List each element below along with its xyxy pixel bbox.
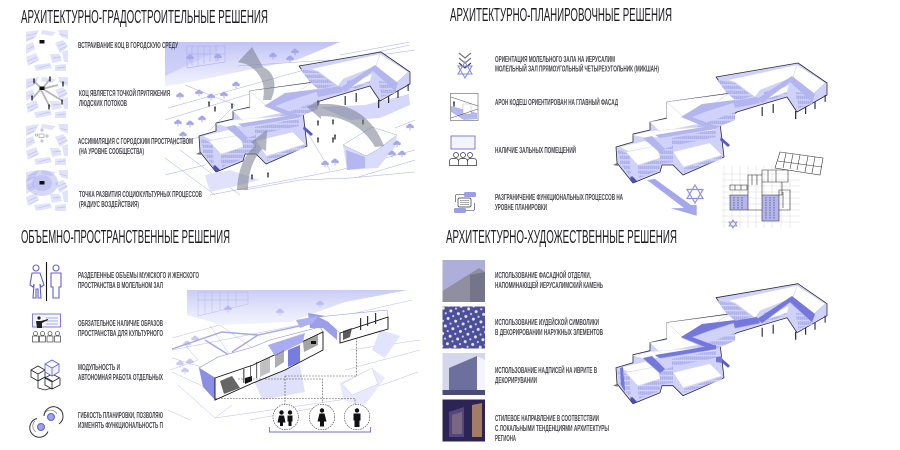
arrow: orientation to Jerusalem [647, 179, 697, 216]
text: functional processes: РАЗГРАНИЧЕНИЕ ФУНКЦИОНАЛЬНЫХ ПРОЦЕССОВ НА [495, 193, 623, 202]
text: educational spaces [78, 319, 163, 338]
heading: artistic: АРХИТЕКТУРНО-ХУДОЖЕСТВЕННЫЕ РЕШЕНИЯ [446, 227, 677, 247]
panel: urban planning solutions [21, 7, 415, 211]
text: point of attraction [79, 89, 170, 108]
text: style direction: С ЛОКАЛЬНЫМИ ТЕНДЕНЦИЯМИ АРХИТЕКТУРЫ [495, 424, 609, 433]
text: aron kodesh: АРОН КОДЕШ ОРИЕНТИРОВАН НА ГЛАВНЫЙ ФАСАД [495, 98, 618, 107]
text: orientation [495, 55, 659, 74]
text: development point: (РАДИУС ВОЗДЕЙСТВИЯ) [79, 200, 139, 209]
icon: functional processes [454, 192, 476, 213]
text: Hebrew inscriptions: ДЕКОРИРУВАНИИ [495, 376, 537, 385]
photo: stone facade [442, 260, 485, 302]
map thumbnail: embedding in city [26, 30, 68, 71]
text: separated volumes [78, 271, 199, 290]
text: separated volumes: РАЗДЕЛЕННЫЕ ОБЪЕМЫ МУЖСКОГО И ЖЕНСКОГО [78, 271, 199, 280]
text: assimilation [78, 137, 193, 156]
icon: modular cubes [31, 360, 60, 390]
arrow: flow from east [307, 100, 384, 147]
panel: artistic solutions [442, 227, 827, 443]
text: style direction: СТИЛЕВОЕ НАПРАВЛЕНИЕ В СООТВЕТСТВИИ [495, 414, 599, 423]
icon: woman and man [30, 262, 61, 301]
icon: children [273, 404, 298, 430]
text: judaic symbols: В ДЕКОРИРОВАНИИ НАРУЖНЫХ ЭЛЕМЕНТОВ [495, 328, 603, 337]
photo: star pattern [442, 306, 485, 348]
text: modularity: МОДУЛЬНОСТЬ И [78, 363, 120, 372]
dashed connector lines [215, 337, 356, 405]
text: assimilation: АССИМИЛЯЦИЯ С ГОРОДСКИМ ПРОСТРАНСТВОМ [78, 137, 193, 146]
text: functional processes [495, 193, 623, 212]
icon: man [344, 404, 370, 430]
panel: planning solutions [450, 5, 827, 228]
text: point of attraction: ЛЮДСКИХ ПОТОКОВ [79, 99, 127, 108]
text: Hebrew inscriptions: ИСПОЛЬЗОВАНИЕ НАДПИСЕЙ НА ИВРИТЕ В [495, 366, 597, 375]
icon: teacher and audience [32, 314, 60, 342]
text: orientation: ОРИЕНТАЦИЯ МОЛЕЛЬНОГО ЗАЛА НА ИЕРУСАЛИМ [495, 55, 615, 64]
arrow: flow from south [237, 130, 267, 190]
site plan illustration with building and flows [165, 42, 415, 195]
panel: volume-spatial solutions [21, 227, 420, 437]
text: point of attraction: КОЦ ЯВЛЯЕТСЯ ТОЧКОЙ ПРИТЯЖЕНИЯ [79, 89, 170, 98]
text: educational spaces: ПРОСТРАНСТВА ДЛЯ КУЛЬТУРНОГО [78, 329, 163, 338]
text: functional processes: УРОВНЕ ПЛАНИРОВКИ [495, 203, 547, 212]
text: modularity: АВТОНОМНАЯ РАБОТА ОТДЕЛЬНЫХ [78, 373, 163, 382]
text: embedding: ВСТРАИВАНИЕ КОЦ В ГОРОДСКУЮ СРЕДУ [78, 41, 179, 50]
icon: aron kodesh [450, 94, 478, 120]
icon: gears flexibility [30, 407, 63, 437]
text: assimilation: (НА УРОВНЕ СООБЩЕСТВА) [79, 147, 144, 156]
text: facade finish: ИСПОЛЬЗОВАНИЕ ФАСАДНОЙ ОТДЕЛКИ, [495, 271, 591, 280]
text: Hebrew inscriptions [495, 366, 597, 385]
text: facade finish [495, 271, 603, 290]
text: orientation: МОЛЕЛЬНЫЙ ЗАЛ ПРЯМОУГОЛЬНЫЙ ЧЕТЫРЕХУГОЛЬНИК (МИКШАН) [495, 64, 659, 74]
text: flexibility [78, 411, 163, 430]
building axonometry with accented facade bands [613, 284, 827, 404]
text: modularity [78, 363, 163, 382]
text: facade finish: НАПОМИНАЮЩЕЙ ИЕРУСАЛИМСКИЙ КАМЕНЬ [495, 281, 603, 290]
text: style direction [495, 414, 609, 443]
icon: halls and audience [450, 136, 476, 166]
section illustration on site [168, 290, 420, 420]
heading: urban planning: АРХИТЕКТУРНО-ГРАДОСТРОИТЕЛЬНЫЕ РЕШЕНИЯ [21, 7, 268, 27]
text: flexibility: ГИБКОСТЬ ПЛАНИРОВКИ, ПОЗВОЛЯЮ [78, 411, 163, 420]
text: flexibility: ИЗМЕНЯТЬ ФУНКЦИОНАЛЬНОСТЬ П [78, 421, 163, 430]
text: judaic symbols [495, 318, 603, 337]
photo: regional style [442, 400, 485, 442]
map thumbnail: people flow attraction [26, 76, 68, 118]
heading: planning: АРХИТЕКТУРНО-ПЛАНИРОВОЧНЫЕ РЕШЕНИЯ [450, 5, 672, 25]
text: development point [79, 190, 202, 209]
map thumbnail: assimilation [26, 124, 68, 165]
floor plan [722, 152, 823, 228]
text: style direction: РЕГИОНА [495, 434, 516, 443]
map thumbnail: radius of influence [26, 170, 68, 211]
text: development point: ТОЧКА РАЗВИТИЯ СОЦИОКУЛЬТУРНЫХ ПРОЦЕССОВ [79, 190, 202, 199]
building axonometry [613, 63, 827, 183]
bracket under figures [270, 427, 370, 432]
text: separated volumes: ПРОСТРАНСТВА В МОЛЕЛЬНОМ ЗАЛ [78, 281, 163, 290]
icon: woman [309, 404, 335, 430]
icon: chevrons and star [458, 53, 472, 78]
icon: star of David [687, 185, 703, 203]
arrow: flow from north [238, 47, 274, 100]
text: educational spaces: ОБЯЗАТЕЛЬНОЕ НАЛИЧИЕ ОБРАЗОВ [78, 319, 163, 328]
text: halls: НАЛИЧИЕ ЗАЛЬНЫХ ПОМЕЩЕНИЙ [495, 146, 576, 155]
cut building volumes [199, 310, 388, 400]
heading: volume-spatial: ОБЪЕМНО-ПРОСТРАНСТВЕННЫЕ РЕШЕНИЯ [21, 227, 230, 247]
photo: Hebrew facade [442, 353, 485, 395]
text: judaic symbols: ИСПОЛЬЗОВАНИЕ ИУДЕЙСКОЙ СИМВОЛИКИ [495, 318, 599, 327]
